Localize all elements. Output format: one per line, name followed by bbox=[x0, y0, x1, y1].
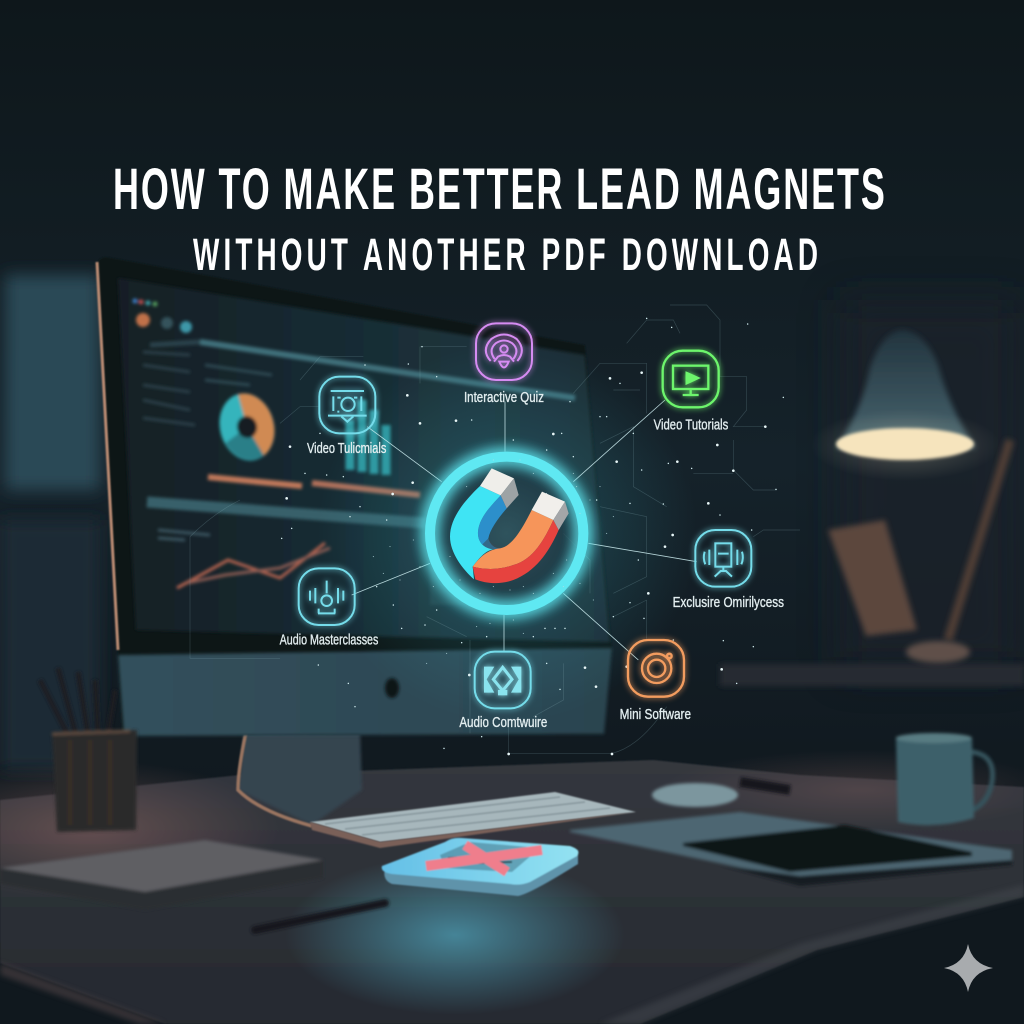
book on shelf bbox=[828, 520, 917, 636]
icon: Video Tutorials (green) bbox=[663, 351, 719, 407]
monitor stand bbox=[238, 730, 362, 826]
tablet and sleeve bbox=[570, 812, 1012, 886]
label: Interactive Quiz: Interactive Quiz bbox=[464, 390, 544, 406]
heading line 1: HOW TO MAKE BETTER LEAD MAGNETS bbox=[113, 157, 885, 222]
label: Audio Masterclasses: Audio Masterclasses bbox=[280, 633, 378, 649]
icon: Exclusive Community Access bbox=[695, 530, 751, 587]
ring bbox=[432, 458, 582, 608]
label: Video Tutorials left: Video Tulicmials bbox=[307, 441, 386, 457]
icon: Interactive Quiz bbox=[476, 323, 532, 380]
desk lamp bbox=[810, 330, 1010, 663]
circuit traces bbox=[190, 305, 800, 753]
keyboard bbox=[310, 792, 636, 848]
donut chart bbox=[212, 387, 282, 467]
particles bbox=[287, 373, 765, 754]
notebook bbox=[0, 840, 323, 910]
crossed-out PDF tile bbox=[382, 838, 578, 896]
heading line 2: WITHOUT ANOTHER PDF DOWNLOAD bbox=[193, 229, 818, 280]
mouse bbox=[652, 782, 790, 807]
label: Audio Courseware: Audio Comtwuire bbox=[459, 715, 547, 731]
desk surface bbox=[0, 750, 1024, 1024]
icon: Mini Software bbox=[628, 640, 684, 697]
monitor bbox=[97, 257, 612, 736]
connector lines bbox=[352, 400, 697, 660]
hologram: connectors, particles and icons bbox=[190, 305, 800, 754]
label: Mini Software: Mini Software bbox=[620, 707, 691, 723]
pencil cup bbox=[40, 668, 137, 832]
icon: Audio Masterclasses bbox=[299, 568, 355, 625]
icon: Audio Courseware bbox=[475, 652, 531, 708]
magnet bbox=[450, 468, 569, 583]
label: Exclusive access: Exclusire Omirilycess bbox=[673, 595, 784, 611]
monitor dashboard bbox=[132, 298, 575, 605]
title bbox=[113, 157, 885, 280]
icon: Video Tutorials (cyan) bbox=[319, 377, 375, 433]
label: Video Tutorials right: Video Tutorials bbox=[654, 418, 728, 434]
pen on desk bbox=[255, 903, 385, 930]
glow behind ring bbox=[317, 343, 697, 723]
icon: sparkle watermark bbox=[944, 944, 993, 992]
coffee mug bbox=[896, 733, 993, 825]
